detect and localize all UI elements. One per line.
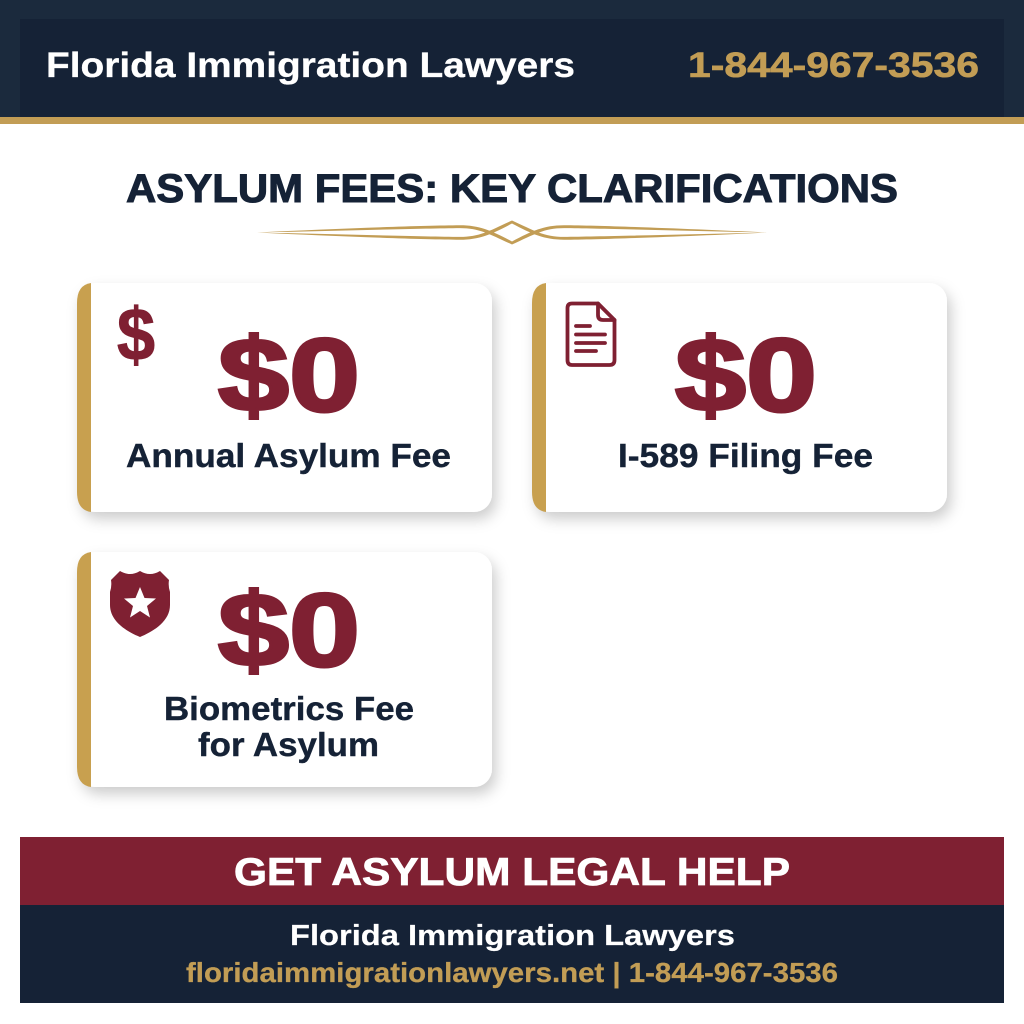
label: Annual Asylum Fee: [126, 437, 451, 474]
label: [164, 690, 414, 763]
amount: $0: [675, 318, 817, 434]
footer firm name: Florida Immigration Lawyers: [290, 920, 735, 952]
card: I-589 filing fee: [532, 283, 947, 512]
card: biometrics fee: [77, 552, 492, 787]
phone number: 1-844-967-3536: [688, 46, 979, 85]
icon: dollar sign: $: [117, 293, 155, 376]
amount: $0: [218, 318, 360, 434]
firm name: Florida Immigration Lawyers: [46, 46, 575, 85]
icon: shield with star: [110, 571, 170, 637]
title: ASYLUM FEES: KEY CLARIFICATIONS: [126, 167, 898, 211]
label: Biometrics Fee: [164, 690, 414, 727]
label: for Asylum: [198, 726, 379, 763]
label: I-589 Filing Fee: [618, 437, 873, 474]
footer contact panel: [20, 905, 1004, 1003]
icon: document: [568, 304, 614, 365]
amount: $0: [218, 573, 360, 689]
ornament divider: [257, 220, 767, 244]
card: annual asylum fee: [77, 283, 492, 512]
banner heading: GET ASYLUM LEGAL HELP: [234, 851, 790, 894]
call to action banner: [20, 837, 1004, 905]
footer website and phone: floridaimmigrationlawyers.net | 1-844-967-3536: [186, 957, 838, 988]
header band: [0, 0, 1024, 124]
